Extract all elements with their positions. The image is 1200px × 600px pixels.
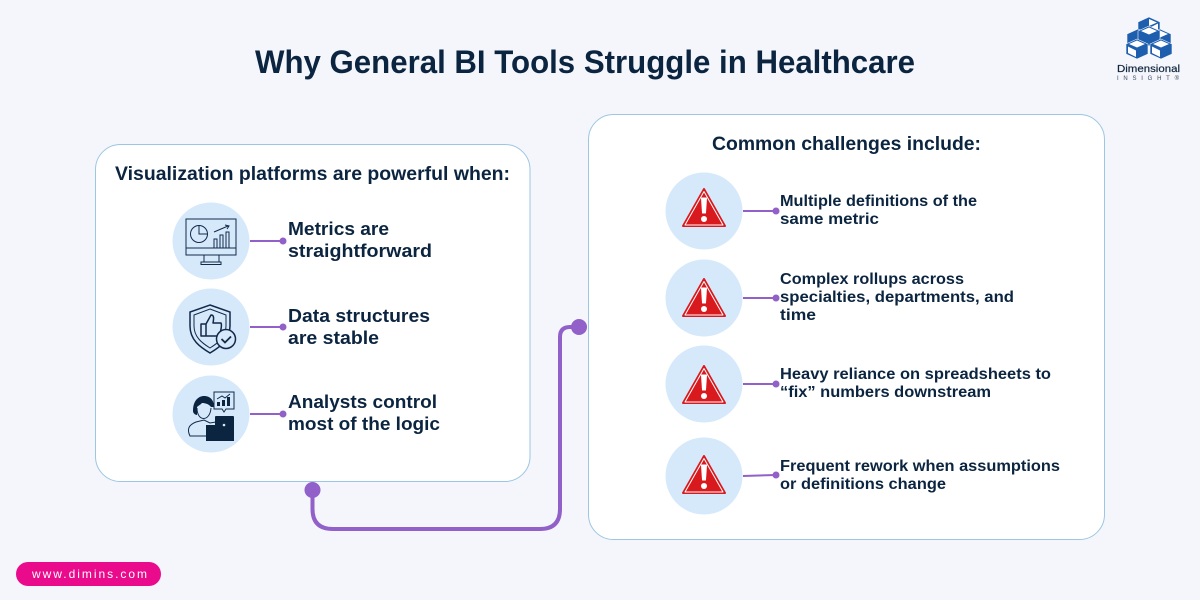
challenge: spreadsheet reliance: “fix” numbers downstream [780,384,991,401]
logo: Dimensional Insight: Dimensional [1117,63,1180,75]
item: data structures are stable: Data structures [288,306,430,326]
challenge: spreadsheet reliance [666,346,1051,422]
title: Why General BI Tools Struggle in Healthcare [255,44,915,80]
heading: common challenges: Common challenges include: [712,134,981,155]
challenge: frequent rework: or definitions change [780,476,946,493]
item: data structures are stable: are stable [288,328,379,348]
website pill: www.dimins.com [31,567,147,581]
item: metrics are straightforward: Metrics are [288,219,389,239]
item: metrics are straightforward: straightforward [288,241,432,261]
challenge: frequent rework [666,438,1060,514]
challenge: frequent rework: Frequent rework when assumptions [780,458,1060,475]
panel: common challenges [588,114,1104,540]
challenge: multiple definitions: same metric [780,211,879,228]
item: metrics are straightforward [172,202,432,280]
item: data structures are stable [172,288,430,366]
challenge: spreadsheet reliance: Heavy reliance on spreadsheets to [780,366,1051,383]
panel: visualization platforms [96,144,530,482]
item: analysts control most of the logic: most of the logic [288,414,440,434]
challenge: multiple definitions: Multiple definitions of the [780,193,977,210]
logo: Dimensional Insight [1117,17,1180,82]
item: analysts control most of the logic: Analysts control [288,392,437,412]
challenge: complex rollups: Complex rollups across [780,271,964,288]
item: analysts control most of the logic [172,376,440,452]
challenge: complex rollups: specialties, departments, and [780,289,1014,306]
connector arrow between panels [304,319,587,529]
challenge: complex rollups [666,260,1014,336]
challenge: multiple definitions [666,172,977,250]
heading: visualization platforms: Visualization platforms are powerful when: [115,164,510,185]
logo: Dimensional Insight: INSIGHT® [1117,75,1180,82]
challenge: complex rollups: time [780,307,816,324]
website pill [16,562,161,586]
